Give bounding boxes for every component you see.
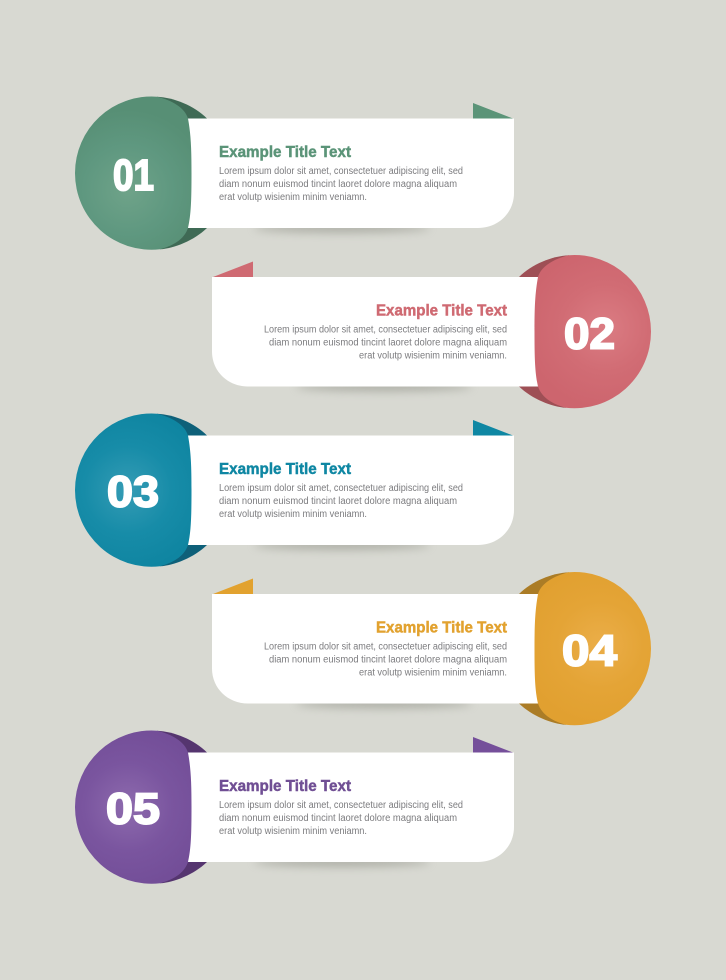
body text 05 [219,800,463,837]
body text 02 [264,324,507,362]
panel: step 02 [212,255,651,408]
card shadow 04 [296,699,472,708]
number 05: 05 [106,784,160,834]
title 04: Example Title Text [376,620,507,636]
circle back 02 [519,255,569,408]
circle front 04 [534,572,651,725]
title 05: Example Title Text [219,778,351,795]
card 04 [212,594,538,704]
body text 04: Lorem ipsum dolor sit amet, consectetuer adipiscing elit, sed [264,642,507,652]
flag 04 [213,578,253,594]
card shadow 03 [254,540,430,550]
body text 01: diam nonum euismod tincint laoret dolore magna aliquam [219,179,457,190]
title 03: Example Title Text [219,461,351,478]
circle front 01 [75,97,192,250]
circle back 01 [157,97,207,249]
title 01: Example Title Text [219,144,351,161]
circle back 03 [157,414,207,566]
card 02 [212,277,538,386]
panel: step 03 [75,414,514,567]
body text 03 [219,483,463,520]
body text 03: Lorem ipsum dolor sit amet, consectetuer adipiscing elit, sed [219,483,463,494]
flag 03 [473,420,513,436]
circle back 04 [519,572,569,725]
circle back 05 [157,731,207,883]
body text 04 [264,642,507,678]
card shadow 05 [254,858,430,866]
title 02: Example Title Text [376,302,507,320]
body text 05: erat volutp wisienim minim veniamn. [219,826,367,837]
circle front 03 [75,414,192,567]
body text 05: diam nonum euismod tincint laoret dolore magna aliquam [219,813,457,824]
body text 01: erat volutp wisienim minim veniamn. [219,192,367,203]
body text 02: diam nonum euismod tincint laoret dolore magna aliquam [269,338,507,348]
card 01 [188,118,514,228]
card 03 [188,436,514,545]
body text 05: Lorem ipsum dolor sit amet, consectetuer adipiscing elit, sed [219,800,463,811]
circle front 02 [534,255,651,408]
card shadow 02 [296,382,472,391]
body text 04: erat volutp wisienim minim veniamn. [359,668,507,678]
flag 02 [213,262,253,277]
body text 02: erat volutp wisienim minim veniamn. [359,350,507,362]
panel: step 01 [75,97,514,250]
flag 01 [473,103,513,118]
body text 01 [219,166,463,203]
number 02: 02 [564,310,615,358]
body text 02: Lorem ipsum dolor sit amet, consectetuer adipiscing elit, sed [264,324,507,336]
panel: step 05 [75,731,514,884]
card 05 [188,752,514,862]
body text 04: diam nonum euismod tincint laoret dolore magna aliquam [269,654,507,666]
body text 03: diam nonum euismod tincint laoret dolore magna aliquam [219,496,457,507]
number 04: 04 [562,626,618,676]
body text 01: Lorem ipsum dolor sit amet, consectetuer adipiscing elit, sed [219,166,463,177]
body text 03: erat volutp wisienim minim veniamn. [219,509,367,520]
panel: step 04 [212,572,651,725]
flag 05 [473,737,513,752]
card shadow 01 [254,224,430,232]
number 01: 01 [113,151,154,200]
number 03: 03 [107,468,159,516]
circle front 05 [75,731,192,884]
